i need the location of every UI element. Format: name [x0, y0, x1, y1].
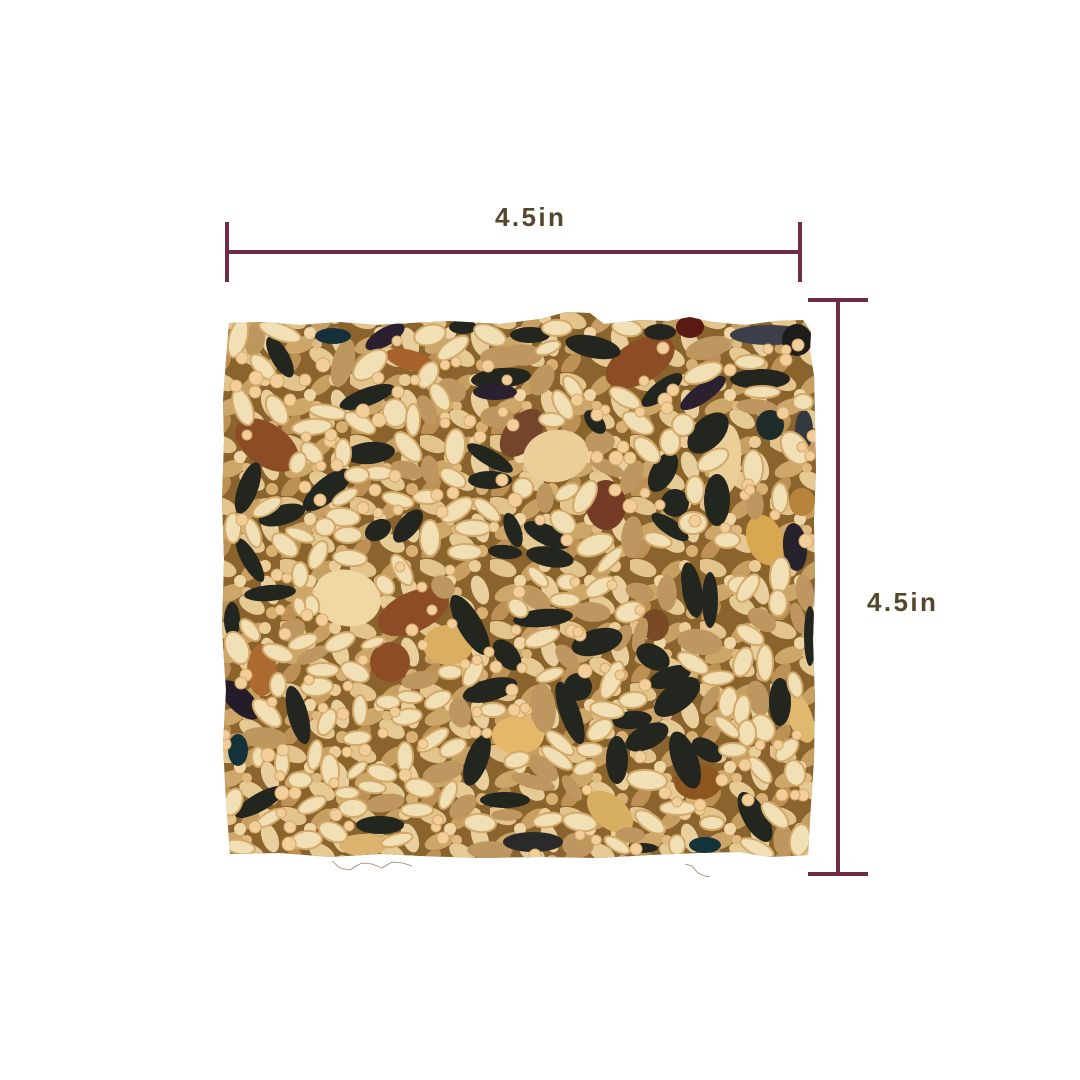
stray threads at bottom edge — [332, 861, 710, 877]
width line with end ticks — [225, 222, 802, 282]
roasted brown nuts — [225, 316, 722, 800]
small millet balls — [219, 336, 819, 861]
height line with end ticks — [808, 298, 868, 876]
horizontal dimension: 4.5in width — [225, 202, 802, 282]
seed bar — [214, 305, 825, 865]
tan sunflower kernels — [220, 323, 816, 858]
pale hulled seeds — [220, 316, 815, 862]
vertical dimension: 4.5in height — [808, 298, 938, 876]
width label: 4.5in — [495, 202, 566, 232]
large pale nuts — [307, 423, 821, 856]
dark sunflower seeds — [214, 318, 816, 853]
height label: 4.5in — [867, 587, 938, 617]
